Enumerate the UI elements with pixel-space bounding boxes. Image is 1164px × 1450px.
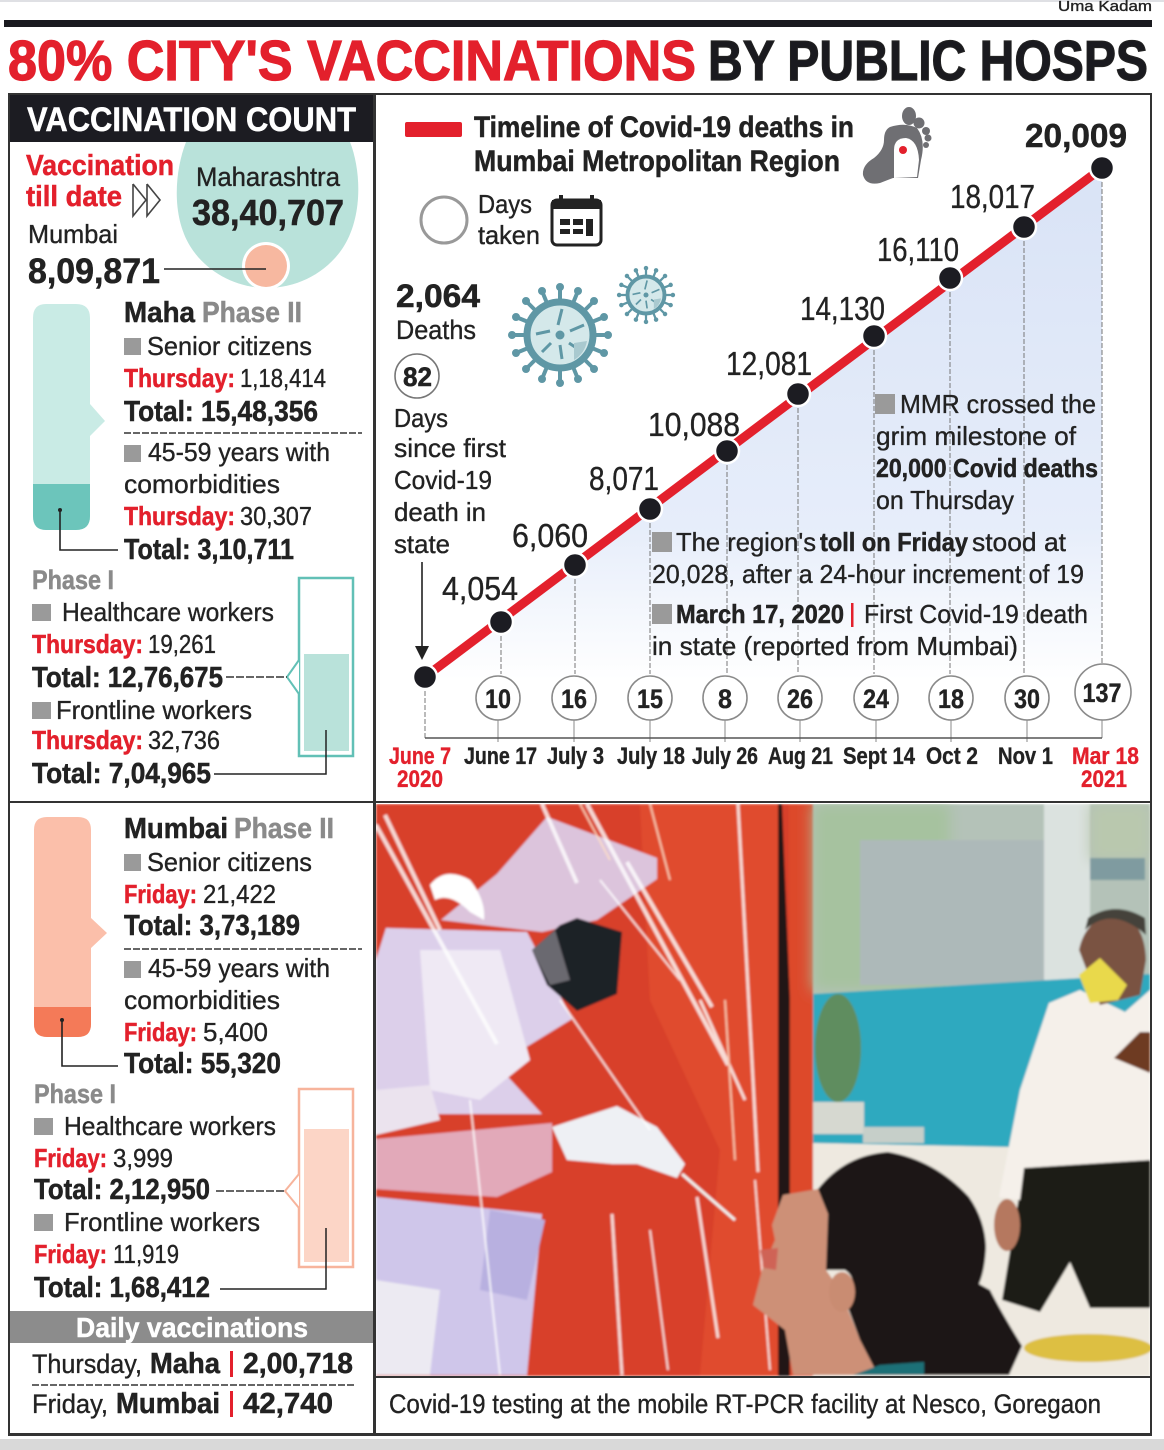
text: Mumbai Phase II: 45-59 years with bbox=[148, 953, 330, 983]
value labels: 4,054 bbox=[442, 570, 518, 607]
date labels: July 3 bbox=[547, 743, 604, 770]
woman: dress bbox=[853, 1362, 924, 1375]
days-taken values: 8 bbox=[718, 684, 732, 714]
text: Mumbai Phase I: Total: 1,68,412 bbox=[34, 1272, 210, 1304]
value labels: 18,017 bbox=[950, 178, 1035, 215]
text: Maha Phase II: Total: 3,10,711 bbox=[124, 534, 294, 566]
callout: 2,064 deaths bbox=[394, 278, 507, 660]
icon: calendar bbox=[552, 195, 601, 245]
text: Maha Phase I: Phase I bbox=[32, 565, 114, 595]
date labels: Mar 18 bbox=[1072, 743, 1139, 770]
value labels: 6,060 bbox=[512, 517, 588, 554]
callout: 2,064 deaths: Deaths bbox=[396, 315, 476, 345]
days-taken values: 137 bbox=[1082, 678, 1122, 708]
legend: days taken: taken bbox=[478, 220, 540, 250]
panel: daily vaccinations: 2,00,718 bbox=[243, 1348, 353, 1380]
woman: hair bbox=[818, 1152, 1022, 1375]
capsule: Mumbai Phase II bbox=[34, 817, 118, 1066]
value labels: 12,081 bbox=[726, 345, 812, 382]
text: Mumbai Phase II: Total: 3,73,189 bbox=[124, 910, 300, 942]
date labels: 2021 bbox=[1081, 766, 1127, 793]
note: toll on Friday: toll on Friday bbox=[820, 527, 968, 557]
text: Mumbai Phase II: Friday: bbox=[124, 1017, 197, 1047]
text: Mumbai Phase I: 11,919 bbox=[113, 1239, 179, 1269]
callout: 2,064 deaths: since first bbox=[394, 433, 507, 463]
callout: 2,064 deaths: state bbox=[394, 529, 450, 559]
yellow object bbox=[1024, 1334, 1152, 1362]
panel: daily vaccinations: 42,740 bbox=[243, 1388, 333, 1420]
mask and face bbox=[532, 918, 622, 1011]
legend: days taken: Days bbox=[478, 189, 532, 219]
dashed drop lines bbox=[425, 168, 1102, 738]
date labels: Oct 2 bbox=[926, 743, 978, 770]
text: Mumbai Phase I: Healthcare workers bbox=[64, 1111, 276, 1141]
date labels: July 18 bbox=[617, 743, 685, 770]
days-taken values: 16 bbox=[561, 684, 587, 714]
capsule: Maha Phase II bbox=[33, 304, 118, 550]
gauge: Mumbai Phase I bbox=[216, 1089, 353, 1289]
woman: face bbox=[753, 1189, 878, 1375]
heading: vaccination count: VACCINATION COUNT bbox=[27, 101, 356, 139]
outdoors bbox=[811, 1141, 1150, 1376]
panel: timeline chart bbox=[389, 107, 1139, 793]
red tent bbox=[376, 804, 813, 1376]
days-taken values: 30 bbox=[1014, 684, 1040, 714]
note: MMR milestone bbox=[875, 389, 1098, 515]
note: MMR milestone: on Thursday bbox=[876, 485, 1014, 515]
top rule bbox=[4, 20, 1152, 27]
text: Mumbai Phase II bbox=[124, 813, 362, 1080]
text: Maha Phase II: 1,18,414 bbox=[240, 363, 326, 393]
days-taken values: 18 bbox=[938, 684, 964, 714]
man: shirt bbox=[999, 990, 1150, 1200]
text: Mumbai Phase I: 3,999 bbox=[113, 1143, 173, 1173]
date labels: June 7 bbox=[389, 743, 451, 770]
callout: 2,064 deaths: Days bbox=[394, 403, 448, 433]
bubble: Mumbai total: Mumbai bbox=[28, 219, 118, 249]
text: Mumbai Phase II: Total: 55,320 bbox=[124, 1048, 281, 1080]
text: Maha Phase I: Healthcare workers bbox=[62, 597, 274, 627]
date labels: Aug 21 bbox=[768, 743, 833, 770]
date labels: 2020 bbox=[397, 766, 443, 793]
white hood fold bbox=[430, 874, 484, 920]
note: first death bbox=[652, 599, 1088, 661]
days-taken values: 26 bbox=[787, 684, 813, 714]
text: Mumbai Phase I: Friday: bbox=[34, 1239, 107, 1269]
legend: timeline bbox=[405, 111, 854, 178]
text: Maha Phase I: Frontline workers bbox=[56, 695, 252, 725]
text: Maha Phase I: Thursday: bbox=[32, 725, 143, 755]
text: Mumbai Phase II: Phase II bbox=[234, 813, 334, 845]
value labels: 14,130 bbox=[800, 290, 885, 327]
label: vaccination till date bbox=[26, 150, 174, 216]
panel: daily vaccinations: Thursday, bbox=[32, 1349, 142, 1379]
legend: days taken bbox=[421, 189, 601, 250]
text: Maha Phase II: Phase II bbox=[202, 297, 302, 329]
note: first death: March 17, 2020 bbox=[676, 599, 844, 629]
text: Mumbai Phase I bbox=[34, 1079, 276, 1304]
text: Maha Phase II: Senior citizens bbox=[147, 331, 312, 361]
bubble: Maharashtra total: 38,40,707 bbox=[192, 192, 344, 233]
panel: vaccination count bbox=[10, 95, 373, 1420]
date labels: July 26 bbox=[692, 743, 758, 770]
panel: daily vaccinations bbox=[10, 1311, 373, 1420]
text: Maha Phase I: 32,736 bbox=[148, 725, 220, 755]
value labels: 8,071 bbox=[589, 460, 659, 497]
man: head bbox=[1079, 912, 1146, 1005]
pole bbox=[778, 804, 790, 1376]
callout: 2,064 deaths: death in bbox=[394, 497, 486, 527]
text: Mumbai Phase I: Phase I bbox=[34, 1079, 116, 1109]
text: Maha Phase II: comorbidities bbox=[124, 469, 280, 499]
title bbox=[8, 29, 1148, 93]
date labels: June 17 bbox=[464, 743, 537, 770]
bubble: Maharashtra total: Maharashtra bbox=[196, 162, 341, 192]
text: Maha Phase I: Total: 12,76,675 bbox=[32, 662, 223, 694]
label: vaccination till date: Vaccination bbox=[26, 150, 174, 182]
gauge: Maha Phase I bbox=[214, 578, 353, 774]
text: Maha Phase I: Thursday: bbox=[32, 629, 143, 659]
text: Maha Phase II: 45-59 years with bbox=[148, 437, 330, 467]
text: Maha Phase II bbox=[124, 297, 362, 566]
date labels: Nov 1 bbox=[998, 743, 1053, 770]
callout: 2,064 deaths: 82 bbox=[403, 362, 432, 392]
legend: timeline: Timeline of Covid-19 deaths in bbox=[474, 111, 854, 144]
text: Mumbai Phase II: 5,400 bbox=[203, 1017, 268, 1047]
glove bbox=[552, 1106, 685, 1178]
days-taken circles bbox=[476, 664, 1131, 720]
note: MMR milestone: 20,000 Covid deaths bbox=[876, 453, 1098, 483]
text: Maha Phase II: Thursday: bbox=[124, 501, 235, 531]
text: Maha Phase II: Thursday: bbox=[124, 363, 235, 393]
bubble: Maharashtra total bbox=[177, 142, 358, 288]
note: first death: in state (reported from Mumbai) bbox=[652, 631, 1018, 661]
text: Mumbai Phase II: Mumbai bbox=[124, 813, 228, 845]
data points bbox=[413, 156, 1114, 689]
woman: ear bbox=[829, 1272, 855, 1312]
value labels: 10,088 bbox=[648, 406, 740, 443]
title: 80% CITY'S VACCINATIONS bbox=[8, 29, 696, 93]
panel: daily vaccinations: Mumbai bbox=[116, 1388, 220, 1420]
panel: daily vaccinations: Friday, bbox=[32, 1389, 108, 1419]
panel: daily vaccinations: Daily vaccinations bbox=[76, 1312, 308, 1343]
text: Mumbai Phase II: comorbidities bbox=[124, 985, 280, 1015]
text: Maha Phase II: 30,307 bbox=[240, 501, 312, 531]
icon: virus large bbox=[512, 287, 608, 383]
man: mask bbox=[1079, 958, 1127, 1003]
man: hand bbox=[994, 1199, 1020, 1251]
callout: 2,064 deaths: 2,064 bbox=[396, 278, 480, 314]
timeline axis bbox=[425, 737, 1102, 739]
legend: timeline: Mumbai Metropolitan Region bbox=[474, 145, 840, 178]
text: Mumbai Phase I: Friday: bbox=[34, 1143, 107, 1173]
note: toll on Friday: stood at bbox=[972, 527, 1067, 557]
value labels: 20,009 bbox=[1025, 117, 1127, 154]
days-taken values: 15 bbox=[637, 684, 663, 714]
date labels bbox=[389, 743, 1139, 793]
caption: Covid-19 testing at the mobile RT-PCR facility at Nesco, Goregaon bbox=[389, 1389, 1101, 1419]
date labels: Sept 14 bbox=[843, 743, 916, 770]
text: Maha Phase II: Total: 15,48,356 bbox=[124, 396, 318, 428]
text: Mumbai Phase II: 21,422 bbox=[203, 879, 276, 909]
man: trousers bbox=[1002, 1160, 1150, 1312]
bubble: Mumbai total: 8,09,871 bbox=[28, 252, 160, 291]
label: vaccination till date: till date bbox=[26, 181, 122, 213]
text: Maha Phase I: 19,261 bbox=[148, 629, 216, 659]
plastic sheet highlights bbox=[376, 804, 770, 1375]
note: first death: First Covid-19 death bbox=[864, 599, 1088, 629]
panel: daily vaccinations: Maha bbox=[150, 1348, 221, 1380]
note: toll on Friday: The region's bbox=[676, 527, 816, 557]
days-taken values: 24 bbox=[863, 684, 889, 714]
callout: 2,064 deaths: Covid-19 bbox=[394, 465, 492, 495]
icon: footprint bbox=[863, 107, 932, 184]
days-taken values bbox=[485, 678, 1122, 714]
text: Mumbai Phase I: Total: 2,12,950 bbox=[34, 1174, 210, 1206]
chart line bbox=[413, 156, 1114, 689]
chart area fill bbox=[425, 168, 1102, 680]
value labels bbox=[442, 117, 1127, 607]
note: toll on Friday: 20,028, after a 24-hour increment of 19 bbox=[652, 559, 1084, 589]
days-taken values: 10 bbox=[485, 684, 511, 714]
PPE figure bbox=[441, 817, 657, 932]
text: Mumbai Phase I: Frontline workers bbox=[64, 1207, 260, 1237]
photo: Covid-19 testing at mobile facility bbox=[376, 804, 1152, 1376]
text: Mumbai Phase II: Senior citizens bbox=[147, 847, 312, 877]
note: MMR milestone: MMR crossed the bbox=[900, 389, 1096, 419]
text: Maha Phase I bbox=[32, 565, 274, 790]
man: diary bbox=[1114, 1032, 1150, 1073]
text: Maha Phase I: Total: 7,04,965 bbox=[32, 758, 211, 790]
note: toll on Friday bbox=[652, 527, 1084, 589]
text: Maha Phase II: Maha bbox=[124, 297, 196, 329]
icon: virus small bbox=[619, 268, 673, 322]
note: MMR milestone: grim milestone of bbox=[876, 421, 1077, 451]
value labels: 16,110 bbox=[877, 231, 959, 268]
stems bbox=[498, 720, 1102, 742]
bubble: Mumbai total bbox=[28, 219, 290, 291]
text: Mumbai Phase II: Friday: bbox=[124, 879, 197, 909]
